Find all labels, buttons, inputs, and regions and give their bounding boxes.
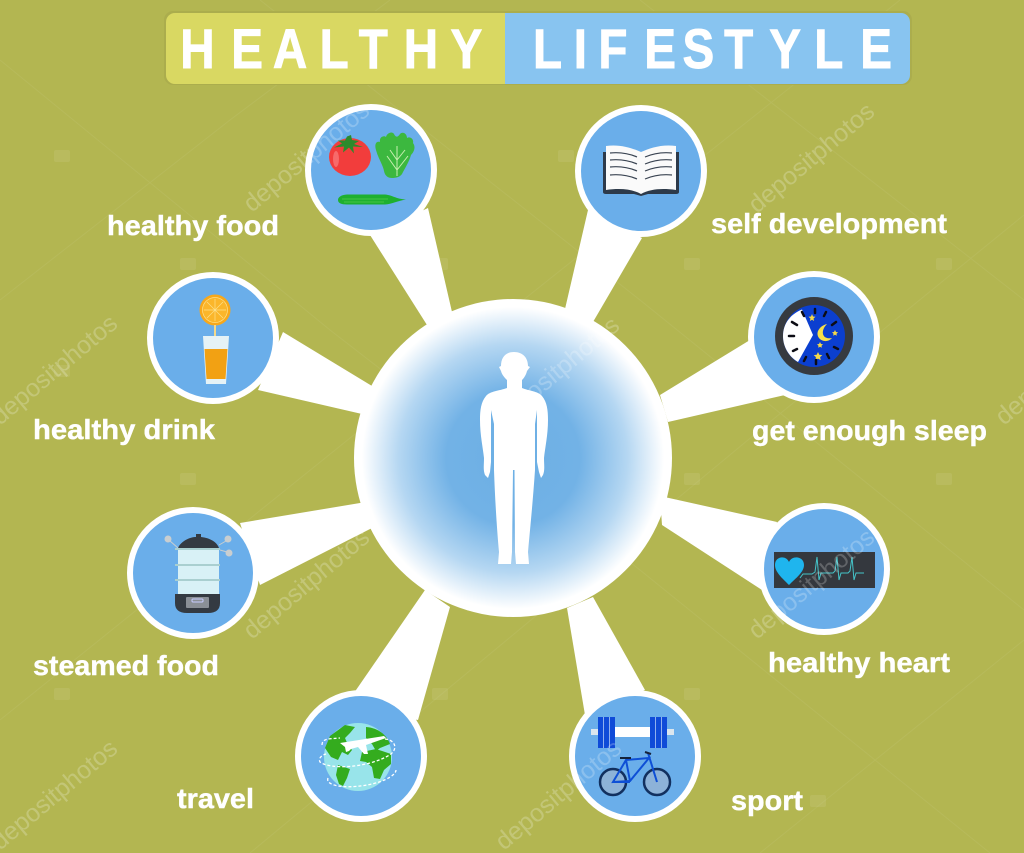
label: steamed food: steamed food bbox=[33, 650, 219, 681]
icon: orange slice bbox=[200, 294, 230, 339]
watermarks: depositphotos bbox=[743, 523, 880, 645]
label: healthy food: healthy food bbox=[107, 210, 279, 241]
label: get enough sleep: get enough sleep bbox=[752, 415, 987, 446]
label: travel: travel bbox=[177, 783, 254, 814]
icon: bicycle bbox=[600, 752, 670, 795]
icon: food steamer bbox=[164, 534, 232, 613]
node: healthy drink bbox=[147, 272, 279, 404]
node: healthy heart bbox=[758, 503, 890, 635]
node: sport bbox=[569, 690, 701, 822]
node: travel bbox=[295, 690, 427, 822]
icon: globe with plane bbox=[319, 723, 396, 791]
node: get enough sleep bbox=[748, 271, 880, 403]
icon: open book bbox=[603, 145, 679, 196]
watermarks: depositphotos bbox=[238, 523, 375, 645]
watermarks: depositphotos bbox=[490, 734, 627, 853]
title banner bbox=[164, 11, 912, 85]
connector beams bbox=[240, 208, 785, 720]
icon: cucumber bbox=[338, 194, 406, 204]
title text: LIFESTYLE bbox=[533, 18, 892, 81]
label: self development: self development bbox=[711, 208, 947, 239]
label: healthy drink: healthy drink bbox=[33, 414, 215, 445]
icon: tomato bbox=[329, 135, 371, 176]
title text: HEALTHY bbox=[180, 18, 482, 81]
title text bbox=[180, 18, 892, 81]
watermarks: depositphotos bbox=[743, 97, 880, 219]
watermarks: depositphotos bbox=[238, 96, 375, 218]
icon: heart cardiogram bbox=[774, 552, 875, 588]
human figure bbox=[480, 352, 548, 564]
node: steamed food bbox=[127, 507, 259, 639]
central circle bbox=[354, 299, 672, 617]
icon: day night clock bbox=[775, 297, 853, 375]
icon: barbell bbox=[591, 717, 674, 748]
node: healthy food bbox=[305, 104, 437, 236]
watermarks: depositphotos bbox=[488, 311, 625, 433]
icon: juice glass bbox=[203, 336, 229, 384]
label: healthy heart: healthy heart bbox=[768, 647, 950, 678]
node: self development bbox=[575, 105, 707, 237]
label: sport: sport bbox=[731, 785, 803, 816]
icon: lettuce bbox=[375, 133, 414, 178]
